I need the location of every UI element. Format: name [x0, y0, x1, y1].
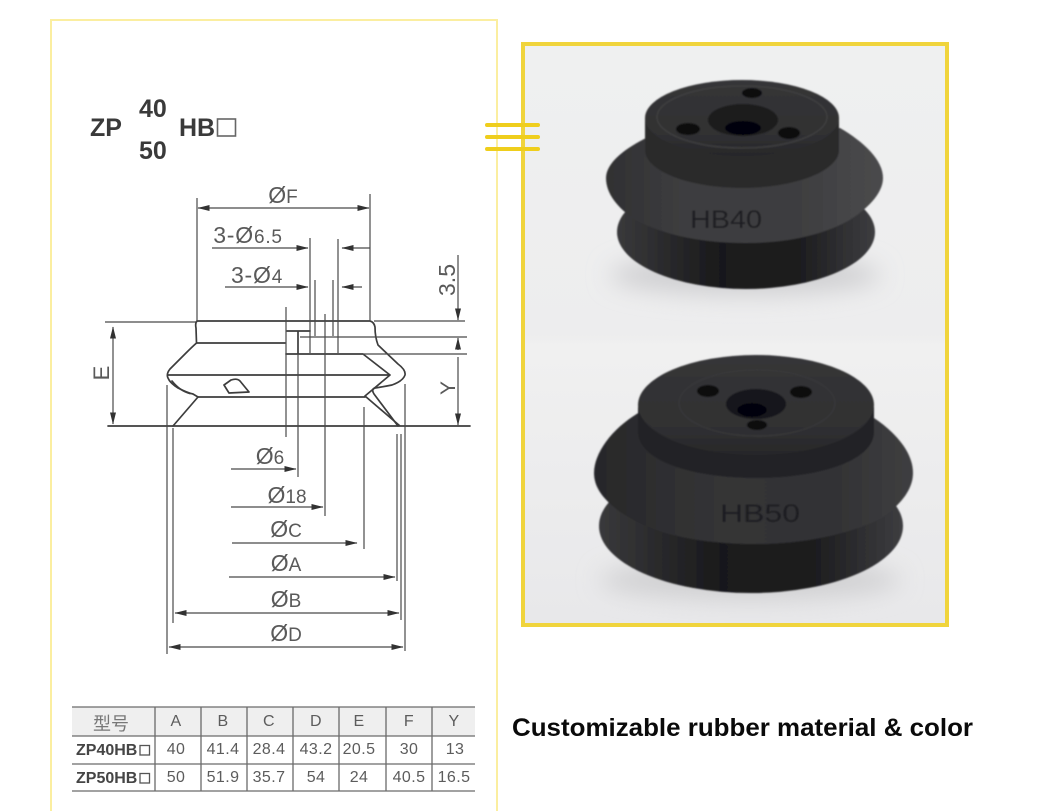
table header row: B [217, 713, 229, 730]
table row: ZP50HB [76, 769, 470, 787]
icon: HB50 suction cup: HB50 [720, 500, 800, 528]
icon: HB50 suction cup [594, 355, 913, 593]
dimension labels: ØA [271, 550, 302, 576]
table row: ZP50HB: 35.7 [253, 769, 285, 786]
table row: ZP40HB: ZP40HB [76, 742, 137, 759]
dimension labels: E [89, 366, 114, 380]
table row: ZP50HB: ZP50HB [76, 770, 137, 787]
table row: ZP50HB: 24 [350, 769, 368, 786]
table row: ZP50HB: 16.5 [438, 769, 470, 786]
dimension labels: Y [437, 381, 460, 395]
dimension labels: ØC [270, 516, 302, 542]
icon: HB40 suction cup: HB40 [690, 206, 762, 234]
table row: ZP50HB: 54 [307, 769, 325, 786]
heading: model code: ZP [90, 114, 122, 142]
technical drawing [89, 182, 470, 654]
table row: ZP40HB: 41.4 [207, 741, 239, 758]
heading: model code [90, 95, 236, 165]
table grid [72, 707, 475, 791]
dimension labels: 3.5 [434, 264, 460, 296]
heading: model code: HB [179, 114, 215, 142]
dimension labels: ØB [271, 586, 301, 612]
table header background [72, 707, 475, 736]
table header row: E [353, 713, 365, 730]
icon: HB40 suction cup [606, 80, 883, 289]
cup shadow: HB50 [600, 560, 900, 600]
heading: model code: 50 [139, 137, 167, 165]
table header row: C [263, 713, 275, 730]
dimension labels: ØD [270, 620, 302, 646]
dimension labels: ØF [268, 182, 298, 208]
panel border [51, 20, 497, 811]
table row: ZP40HB: 13 [446, 741, 464, 758]
table row: ZP50HB: 51.9 [207, 769, 239, 786]
dimension labels: 3-Ø6.5 [213, 222, 283, 248]
icon: three yellow bars [487, 125, 538, 149]
table row: ZP40HB: 30 [400, 741, 418, 758]
table header row: Y [448, 713, 460, 730]
dimension labels: Ø18 [267, 482, 307, 508]
heading: model code: 40 [139, 95, 167, 123]
table header row: F [404, 713, 414, 730]
table header row [93, 713, 460, 734]
cup shadow: HB40 [610, 255, 880, 295]
table header row: A [170, 713, 182, 730]
table row: ZP40HB: 20.5 [343, 741, 375, 758]
caption: Customizable rubber material & color [512, 714, 973, 742]
dimension lines [105, 194, 467, 654]
panel: product photos [487, 44, 947, 625]
dimension table [72, 707, 475, 791]
photo background [523, 44, 947, 625]
dimension labels: Ø6 [256, 443, 284, 469]
table row: ZP40HB: 43.2 [300, 741, 332, 758]
table row: ZP40HB: 28.4 [253, 741, 285, 758]
dimension labels: 3-Ø4 [231, 262, 283, 288]
table header row: 型号 [93, 714, 129, 734]
panel: specification sheet [51, 20, 497, 811]
dimension labels [89, 182, 460, 646]
yellow photo frame [523, 44, 947, 625]
table header row: D [310, 713, 322, 730]
table row: ZP40HB: 40 [167, 741, 185, 758]
table row: ZP40HB [76, 741, 464, 759]
table row: ZP50HB: 40.5 [393, 769, 425, 786]
table row: ZP50HB: 50 [167, 769, 185, 786]
cup outline [108, 321, 470, 426]
